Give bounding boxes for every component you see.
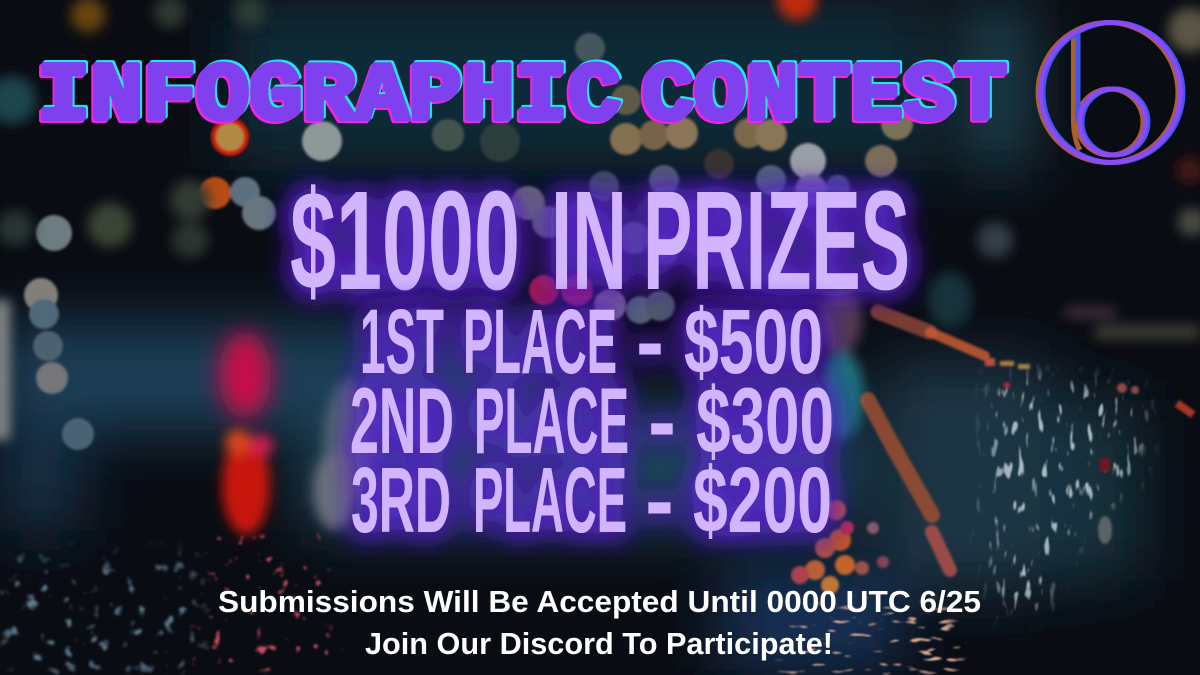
- second place: -: [648, 368, 676, 473]
- prize list: [350, 291, 834, 552]
- first place: 1ST: [360, 291, 444, 393]
- third place: 3RD: [351, 448, 451, 552]
- title cyan highlight layer: CONTEST: [644, 48, 1009, 142]
- title purple face: INFOGRAPHIC: [37, 50, 621, 144]
- third place: PLACE: [473, 448, 627, 552]
- speckled reflections: blue: [0, 544, 210, 675]
- speckled reflections: red: [187, 532, 344, 674]
- dim bokeh lights: [0, 0, 1200, 530]
- kerb highlights: [985, 358, 1195, 544]
- reflection streaks: orange curb lights: [868, 312, 985, 570]
- submission deadline text: Submissions Will Be Accepted Until 0000 UTC 6/25: [218, 584, 981, 619]
- speckled reflections: wet kerb: [972, 363, 1158, 622]
- prize heading: $1000 in prizes: [290, 161, 910, 319]
- first place: $500: [684, 291, 823, 393]
- title magenta shadow layer: [35, 52, 1005, 146]
- orange bokeh cluster: [791, 500, 889, 594]
- second place: [350, 368, 834, 473]
- first place: [360, 291, 823, 393]
- third place: -: [645, 448, 674, 552]
- logo: circled b: [1038, 22, 1183, 162]
- second place: PLACE: [474, 368, 629, 473]
- third place: $200: [693, 448, 832, 552]
- title cyan highlight layer: [39, 48, 1009, 142]
- prize heading: $1000 in prizes: PRIZES: [643, 161, 910, 319]
- second place: $300: [696, 368, 834, 473]
- prize heading: $1000 in prizes: $1000: [290, 161, 520, 319]
- title magenta shadow layer: CONTEST: [640, 52, 1005, 146]
- title magenta shadow layer: INFOGRAPHIC: [35, 52, 619, 146]
- first place: -: [636, 291, 664, 393]
- title purple face: CONTEST: [642, 50, 1007, 144]
- traffic light smear: red: [222, 429, 273, 535]
- title cyan highlight layer: INFOGRAPHIC: [39, 48, 623, 142]
- third place: [351, 448, 832, 552]
- prize heading: $1000 in prizes: IN: [551, 161, 627, 319]
- title: Infographic Contest: [35, 48, 1009, 146]
- title purple face: [37, 50, 1007, 144]
- discord call to action: Join Our Discord To Participate!: [365, 626, 833, 661]
- first place: PLACE: [463, 291, 617, 393]
- traffic light smear: pink: [219, 331, 271, 419]
- speckled reflections: orange: [774, 596, 967, 675]
- bokeh lights: upper area: [24, 33, 913, 450]
- second place: 2ND: [350, 368, 454, 473]
